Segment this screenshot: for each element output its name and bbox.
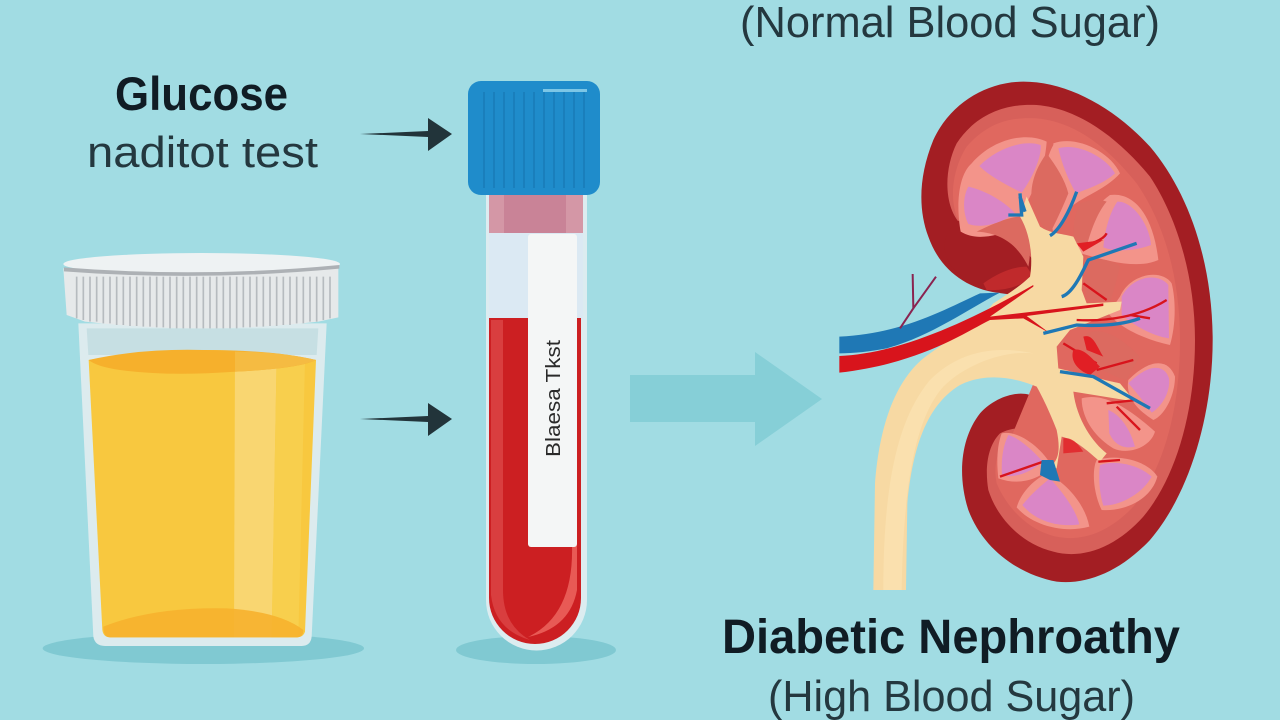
darker cortical columns — [977, 153, 1140, 380]
urine liquid — [89, 350, 316, 637]
icon: blood test tube — [456, 81, 616, 664]
cup body — [78, 323, 327, 646]
medulla pink halos — [958, 137, 1175, 529]
glass tube — [486, 190, 587, 650]
inner notch top — [945, 220, 1025, 287]
lid — [63, 268, 338, 328]
tube shadow — [456, 636, 616, 664]
arrow: to tube cap — [360, 118, 452, 151]
renal pyramids — [964, 143, 1169, 525]
arrow: large progression arrow — [630, 352, 822, 446]
pink upper section — [489, 195, 583, 233]
red patches — [1063, 240, 1103, 453]
red arterioles — [1000, 233, 1167, 477]
heading: high blood sugar: (High Blood Sugar) — [768, 672, 1135, 720]
renal vein — [839, 293, 1000, 353]
arrow: to tube blood — [360, 403, 452, 436]
renal capsule — [921, 82, 1213, 582]
small branching vessel — [900, 274, 936, 328]
text: test subtitle: naditot test — [87, 128, 318, 177]
cortex — [947, 105, 1195, 554]
label text: Blaesa Tkst — [543, 340, 565, 457]
white band — [489, 233, 583, 319]
blue calyx patch — [1040, 460, 1060, 482]
renal pelvis — [873, 197, 1135, 590]
inner cortex — [953, 118, 1180, 538]
renal artery — [839, 285, 1103, 373]
blood — [489, 318, 581, 644]
cup shadow — [43, 633, 364, 664]
blue collecting vessels — [1008, 192, 1150, 408]
heading: glucose: Glucose — [115, 67, 288, 120]
icon: kidney cross-section — [839, 82, 1213, 590]
cap — [468, 81, 600, 195]
icon: urine specimen cup — [43, 253, 364, 664]
heading: diabetic nephropathy: Diabetic Nephroathy — [722, 611, 1180, 664]
tube label — [528, 234, 577, 547]
